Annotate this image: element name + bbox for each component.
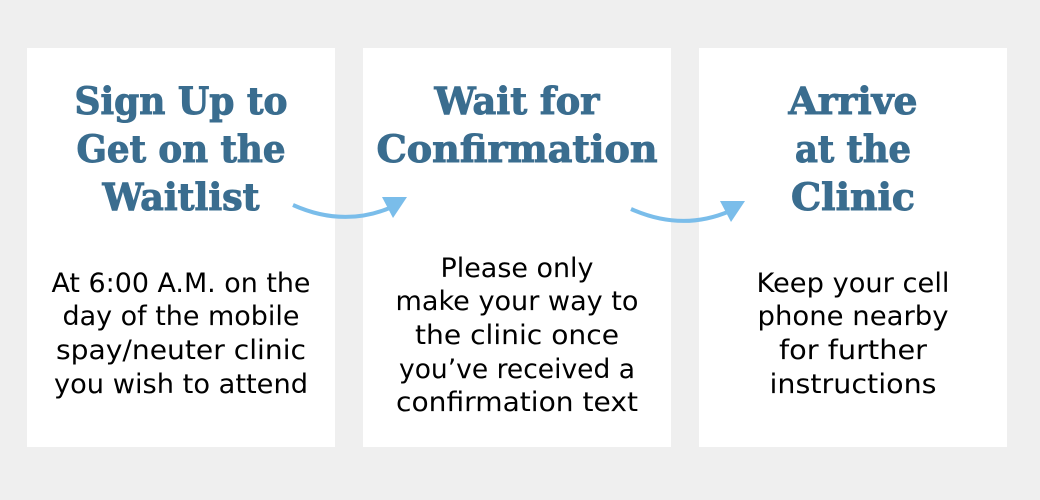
heading: arrive at the clinic: Clinic (791, 175, 915, 219)
heading: sign up: Sign Up to (74, 79, 288, 123)
text block: confirmation details: the clinic once (415, 320, 619, 351)
text block: sign up details: day of the mobile (62, 301, 300, 332)
text block: arrival details: Keep your cell (756, 268, 950, 299)
panel background: wait for confirmation (363, 48, 671, 447)
text block: confirmation details (396, 253, 638, 418)
text block: sign up details: At 6:00 A.M. on the (52, 268, 310, 299)
text block: confirmation details: make your way to (396, 286, 638, 317)
heading: wait for confirmation: Confirmation (376, 127, 658, 171)
arrow: step two to step three (631, 201, 745, 222)
text block: confirmation details: you’ve received a (399, 354, 635, 385)
text block: arrival details (756, 268, 950, 400)
heading: sign up: Waitlist (102, 175, 260, 219)
heading: arrive at the clinic: at the (795, 127, 911, 171)
heading: wait for confirmation: Wait for (434, 79, 600, 123)
text block: confirmation details: Please only (440, 253, 594, 284)
text block: sign up details: spay/neuter clinic (56, 335, 306, 366)
heading: wait for confirmation (376, 79, 658, 171)
heading: sign up: Get on the (76, 127, 286, 171)
text block: arrival details: instructions (770, 369, 936, 400)
text block: sign up details: you wish to attend (54, 369, 308, 400)
arrow: step one to step two (293, 197, 407, 218)
heading: arrive at the clinic (787, 79, 918, 219)
panel: sign up (27, 48, 335, 447)
text block: arrival details: for further (779, 335, 927, 366)
panel: arrive at the clinic (699, 48, 1007, 447)
heading: arrive at the clinic: Arrive (787, 79, 918, 123)
text block: confirmation details: confirmation text (396, 387, 638, 418)
panel: wait for confirmation (363, 48, 671, 447)
text block: arrival details: phone nearby (758, 301, 948, 332)
panel background: arrive at the clinic (699, 48, 1007, 447)
heading: sign up (74, 79, 288, 219)
text block: sign up details (52, 268, 310, 400)
panel background: sign up (27, 48, 335, 447)
